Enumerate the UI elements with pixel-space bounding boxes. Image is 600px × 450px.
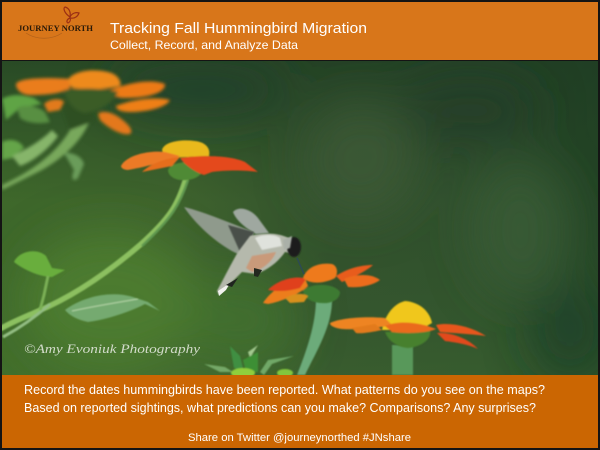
top banner xyxy=(2,2,598,60)
tail xyxy=(218,285,228,296)
prompt text line one: Record the dates hummingbirds have been reported. What patterns do you see on the maps? xyxy=(24,383,545,397)
bottom banner xyxy=(2,375,598,448)
right flower stem xyxy=(392,345,413,375)
right orange flower xyxy=(330,301,486,349)
body xyxy=(217,234,297,295)
near wing xyxy=(184,207,254,254)
beak xyxy=(297,258,304,274)
head xyxy=(287,237,301,257)
title: Tracking Fall Hummingbird Migration xyxy=(110,20,367,37)
photo: hummingbird and flowers xyxy=(2,61,600,380)
top-left orange flower xyxy=(16,70,170,134)
far wing xyxy=(233,209,269,234)
prompt text line two: Based on reported sightings, what predictions can you make? Comparisons? Any surprises? xyxy=(24,401,536,415)
icon: butterfly xyxy=(64,7,79,23)
small leaf on stem xyxy=(14,251,65,310)
long curved stem xyxy=(2,178,188,337)
hummingbird xyxy=(184,207,304,296)
photo credit: ©Amy Evoniuk Photography xyxy=(24,342,201,356)
large pale leaf xyxy=(65,294,160,322)
blurred foliage, upper left xyxy=(2,95,96,190)
top-center orange flower xyxy=(121,140,258,180)
feet xyxy=(254,268,262,277)
photo background xyxy=(2,61,600,380)
center flower stem xyxy=(297,298,332,375)
logo wordmark: JOURNEY NORTH xyxy=(18,23,93,33)
bottom center leaves xyxy=(205,345,294,375)
share line: Share on Twitter @journeynorthed #JNshare xyxy=(188,432,411,444)
subtitle: Collect, Record, and Analyze Data xyxy=(110,38,298,52)
Journey North logo xyxy=(18,7,93,38)
center orange flower xyxy=(263,264,380,304)
